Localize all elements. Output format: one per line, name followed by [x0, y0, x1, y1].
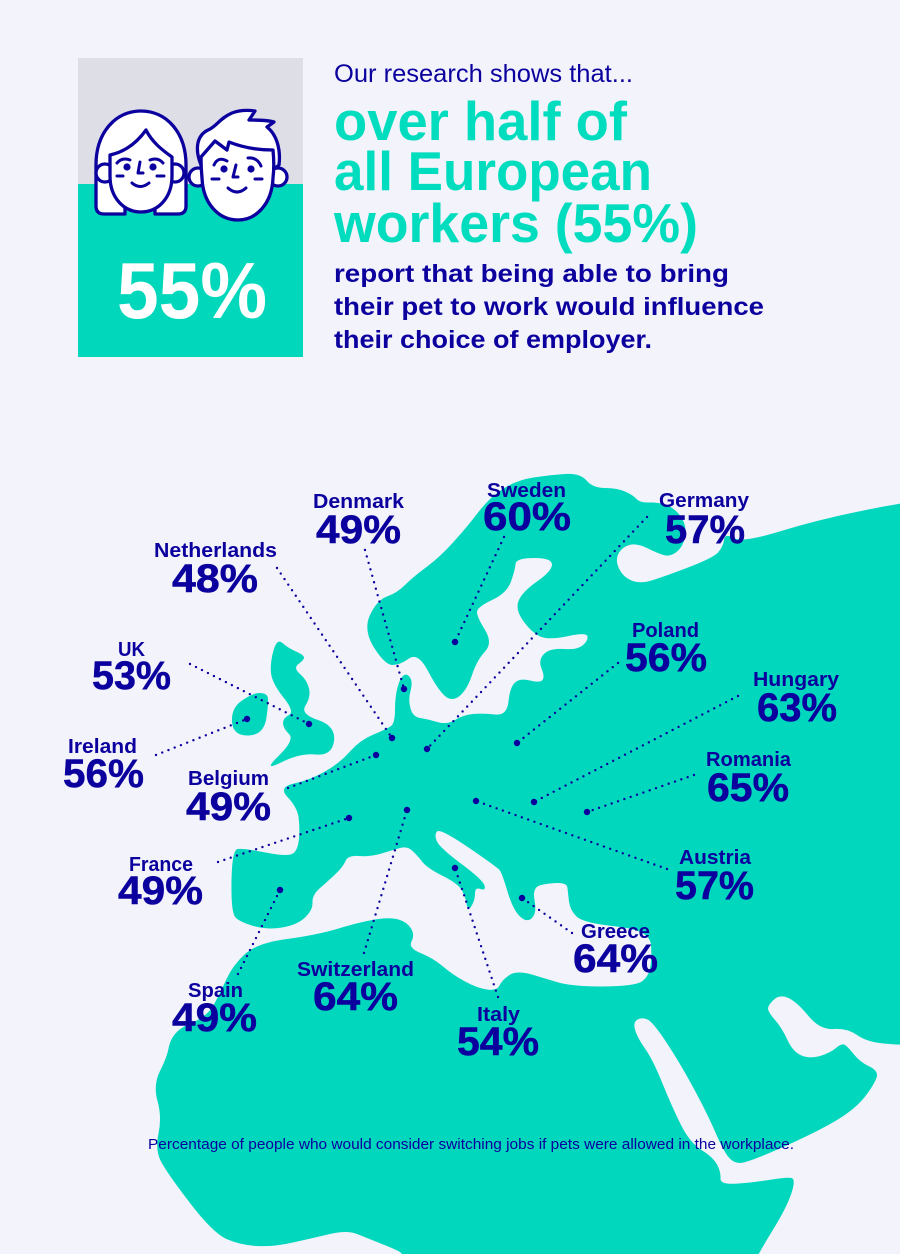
- label: Netherlands 48%: [154, 540, 277, 601]
- stat: 55%: 55%: [117, 246, 267, 335]
- label: Hungary 63%: Hungary: [753, 669, 840, 691]
- intro text: Our research shows that...: [334, 60, 633, 88]
- label: Switzerland 64%: 64%: [313, 975, 398, 1019]
- heading: [333, 90, 698, 254]
- label: Romania 65%: 65%: [707, 766, 789, 810]
- leader: UK: [190, 664, 312, 727]
- label: Poland 56%: Poland: [632, 620, 699, 642]
- label: Romania 65%: Romania: [706, 749, 792, 771]
- label: Ireland 56%: 56%: [63, 752, 144, 796]
- label: Hungary 63%: 63%: [757, 686, 837, 730]
- label: Italy 54%: Italy: [477, 1004, 521, 1026]
- label: Austria 57%: 57%: [675, 864, 754, 908]
- leader: Austria: [473, 798, 667, 869]
- label: Netherlands 48%: 48%: [172, 557, 258, 601]
- leader: Italy: [452, 865, 498, 997]
- label: Romania 65%: [706, 749, 792, 810]
- leader: Germany: [424, 517, 647, 752]
- label: Sweden 60%: 60%: [483, 495, 571, 539]
- label: Poland 56%: 56%: [625, 636, 707, 680]
- label: Spain 49%: 49%: [172, 996, 257, 1040]
- label: Denmark 49%: 49%: [316, 508, 401, 552]
- leader: Netherlands: [277, 568, 395, 741]
- label: France 49%: France: [129, 854, 193, 876]
- label: Greece 64%: [573, 921, 658, 981]
- subheading text: report that being able to bring: [334, 260, 729, 288]
- leader: Sweden: [452, 537, 504, 645]
- label: Denmark 49%: [313, 491, 405, 552]
- label: Belgium 49%: [186, 768, 271, 829]
- label: Belgium 49%: 49%: [186, 785, 271, 829]
- map of Europe: [156, 474, 900, 1254]
- label: UK 53%: UK: [118, 639, 146, 661]
- icon: man face: [189, 110, 287, 220]
- heading: all European: [334, 140, 652, 202]
- label: Belgium 49%: Belgium: [188, 768, 269, 790]
- label: Sweden 60%: Sweden: [487, 480, 566, 502]
- leader: Denmark: [365, 550, 407, 692]
- leader: Romania: [584, 775, 694, 815]
- leader: France: [218, 815, 352, 862]
- label: Hungary 63%: [753, 669, 840, 730]
- label: UK 53%: 53%: [92, 654, 171, 698]
- label: Spain 49%: [172, 980, 257, 1040]
- label: Germany 57%: Germany: [659, 490, 750, 512]
- label: Spain 49%: Spain: [188, 980, 243, 1002]
- leader: Spain: [238, 887, 283, 974]
- label: Italy 54%: 54%: [457, 1020, 539, 1064]
- subheading text: [334, 260, 764, 354]
- label: Switzerland 64%: Switzerland: [297, 959, 414, 981]
- label: France 49%: 49%: [118, 869, 203, 913]
- label: Austria 57%: Austria: [679, 847, 752, 869]
- panel: 55% stat card: [78, 58, 303, 357]
- subheading text: their pet to work would influence: [334, 293, 764, 321]
- subheading text: their choice of employer.: [334, 326, 652, 354]
- leader: Hungary: [531, 696, 738, 805]
- label: Ireland 56%: Ireland: [68, 736, 137, 758]
- leader: Belgium: [288, 752, 379, 788]
- heading: workers (55%): [333, 192, 698, 254]
- leader: Poland: [514, 663, 618, 746]
- label: Denmark 49%: Denmark: [313, 491, 405, 513]
- label: Germany 57%: 57%: [665, 508, 745, 552]
- caption: Percentage of people who would consider switching jobs if pets were allowed in the workplace.: [148, 1136, 794, 1153]
- label: Greece 64%: Greece: [581, 921, 650, 943]
- heading: over half of: [334, 90, 628, 152]
- label: Switzerland 64%: [297, 959, 414, 1019]
- label: Sweden 60%: [483, 480, 571, 539]
- leader: Ireland: [156, 716, 250, 755]
- label: Netherlands 48%: Netherlands: [154, 540, 277, 562]
- label: Greece 64%: 64%: [573, 937, 658, 981]
- icon: woman face: [96, 111, 186, 214]
- leader: Greece: [519, 895, 572, 933]
- leader: Switzerland: [364, 807, 410, 953]
- label: Germany 57%: [659, 490, 750, 552]
